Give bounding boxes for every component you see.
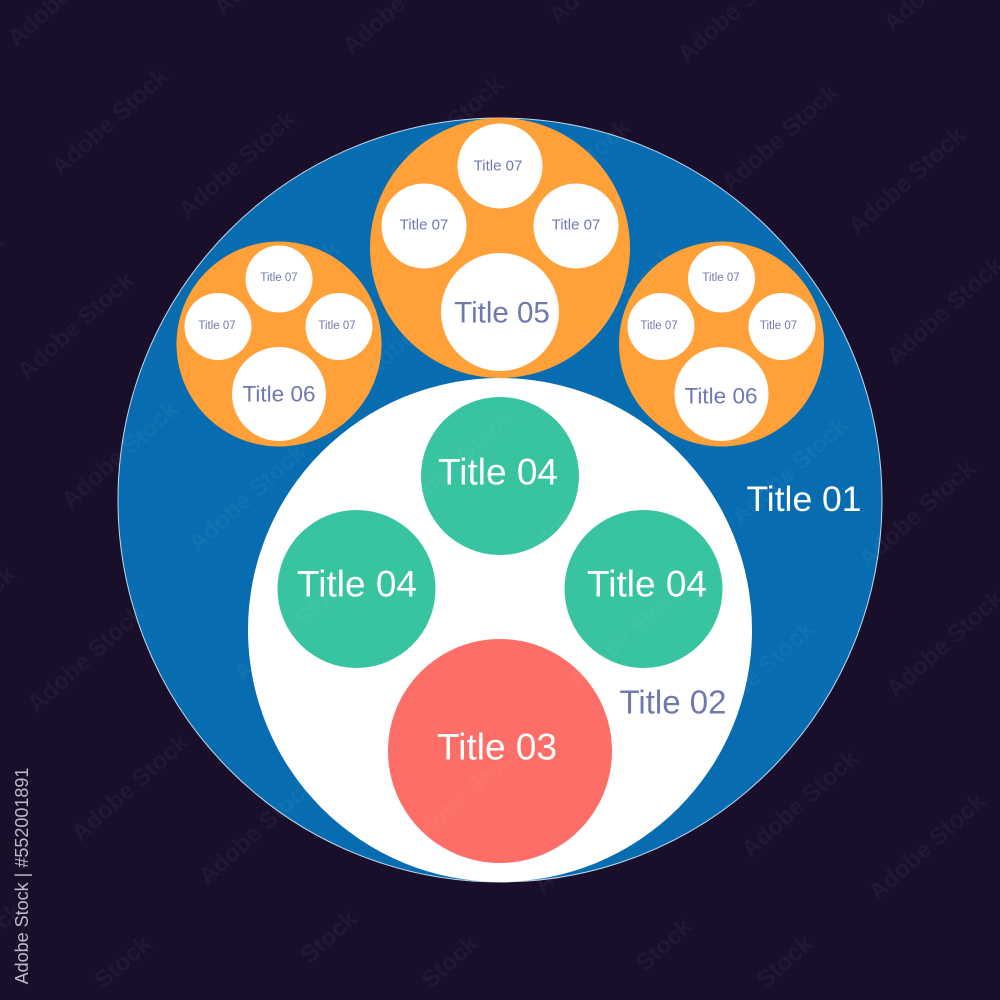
watermark pattern: Adobe Stock [228, 568, 356, 687]
watermark pattern: Adobe Stock [692, 615, 820, 734]
watermark pattern: Adobe Stock [682, 282, 810, 401]
watermark pattern: Stock [296, 905, 363, 969]
watermark pattern: Adobe Stock [46, 62, 174, 181]
circle: Title 07 top: Title 07 [260, 272, 298, 284]
watermark pattern: Adobe Stock [726, 411, 854, 530]
circle: Title 07 left [382, 184, 466, 268]
watermark pattern: Adobe Stock [528, 779, 656, 898]
circle: Title 05: Title 05 [454, 296, 550, 330]
heading: Title 01: Title 01 [746, 479, 862, 519]
watermark pattern: Adobe Stock [173, 105, 301, 224]
watermark pattern: Adobe Stock [381, 70, 509, 189]
circle: Title 06 [232, 347, 326, 441]
watermark pattern: Stock [752, 930, 819, 994]
watermark pattern: Adobe Stock [66, 728, 194, 847]
circle: Title 07 top: Title 07 [474, 158, 522, 174]
watermark pattern: Adobe Stock [736, 744, 864, 863]
watermark pattern: Adobe Stock [391, 403, 519, 522]
circle: Title 06: Title 06 [243, 382, 315, 406]
watermark pattern: Adobe Stock [508, 113, 636, 232]
circle: Title 07 right [534, 184, 618, 268]
circle: Title 04 left: Title 04 [297, 564, 417, 604]
circle: Title 04 right: Title 04 [587, 564, 707, 604]
watermark pattern: Adobe Stock [22, 599, 150, 718]
circle: Title 07 left: Title 07 [400, 216, 448, 234]
watermark pattern: Adobe Stock [183, 438, 311, 557]
side stock number: Adobe Stock | #552001891 [12, 768, 32, 984]
circle: Title 07 top [458, 124, 542, 208]
circle: Title 04 left [278, 510, 436, 668]
watermark pattern: Stock [90, 930, 157, 994]
circle: Title 07 top [246, 246, 312, 312]
circle: Title 07 right: Title 07 [552, 216, 600, 234]
watermark pattern: Adobe Stock [347, 274, 475, 393]
panel: white circle Title 02 [248, 378, 752, 882]
watermark pattern: Stock [417, 930, 484, 994]
circle: Title 07 left [628, 293, 694, 360]
circle: Title 04 right [564, 510, 722, 668]
circle: Title 07 top: Title 07 [702, 272, 740, 284]
watermark pattern: Adobe Stock [716, 78, 844, 197]
watermark pattern: Adobe Stock [357, 607, 485, 726]
circle: Title 03: Title 03 [437, 726, 557, 768]
watermark pattern: Adobe Stock [863, 787, 991, 906]
circle: Title 05 [441, 253, 559, 371]
watermark pattern: Adobe Stock [843, 121, 971, 240]
circle: Title 07 right [306, 293, 372, 360]
panel: orange circle right [619, 242, 824, 446]
heading: Title 02: Title 02 [620, 684, 726, 720]
circle: Title 07 left: Title 07 [640, 320, 678, 332]
watermark pattern: Adobe Stock [193, 771, 321, 890]
watermark pattern: Adobe Stock [553, 243, 681, 362]
circle: Title 07 right: Title 07 [760, 320, 797, 332]
circle: Title 07 right [748, 293, 816, 360]
circle: Title 07 top [688, 246, 755, 312]
circle: Title 07 left: Title 07 [198, 320, 236, 332]
watermark pattern: Adobe Stock [56, 395, 184, 514]
panel: orange circle left [176, 242, 382, 446]
watermark pattern: Adobe Stock [563, 576, 691, 695]
watermark pattern: Adobe Stock [401, 736, 529, 855]
watermark pattern: Adobe Stock [12, 266, 140, 385]
circle: Title 04 top: Title 04 [438, 452, 558, 492]
circle: Title 04 top [421, 397, 579, 555]
circle: Title 06 [674, 347, 768, 441]
watermark pattern: Adobe Stock [218, 235, 346, 354]
watermark pattern: Adobe Stock [518, 446, 646, 565]
panel: orange circle top [370, 118, 630, 378]
circle: Title 07 right: Title 07 [318, 320, 356, 332]
watermark pattern: Stock [631, 913, 698, 977]
circle: Title 07 left [184, 293, 252, 360]
watermark pattern: Adobe Stock [853, 454, 981, 573]
circle: Title 06: Title 06 [685, 384, 757, 408]
circle: Title 03 [388, 639, 612, 863]
